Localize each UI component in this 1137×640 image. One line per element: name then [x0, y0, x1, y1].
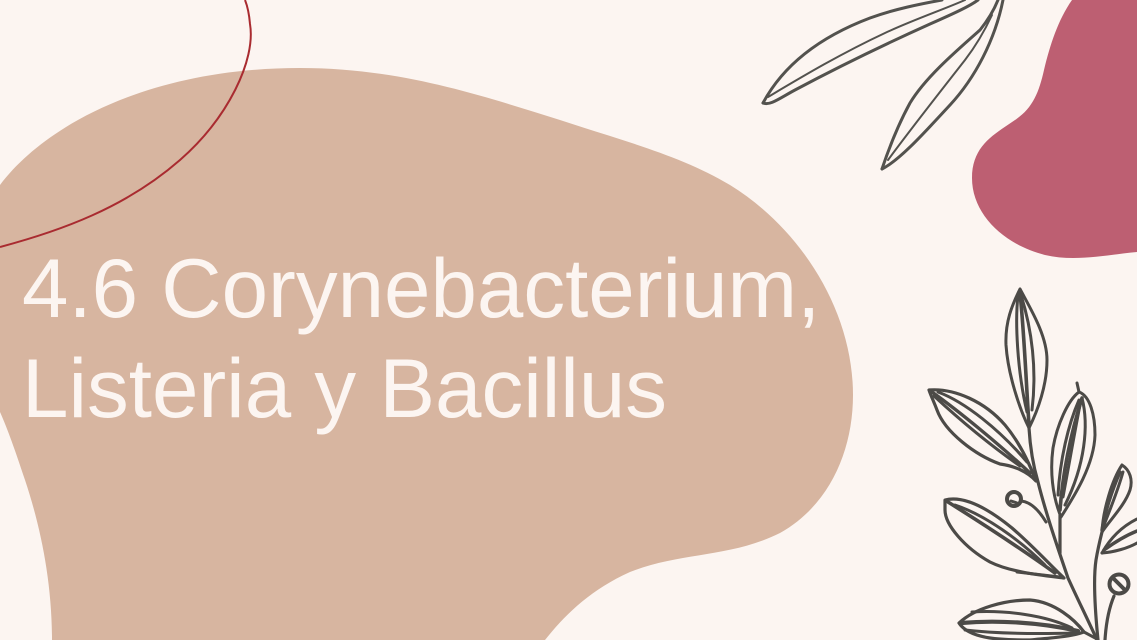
title: Listeria y Bacillus [22, 341, 667, 435]
leaf: upper left [929, 390, 1036, 481]
title: 4.6 Corynebacterium, [22, 241, 820, 335]
leaf: upper left [763, 0, 978, 104]
leaf: top [1006, 289, 1047, 428]
leaf: centre right [1052, 383, 1095, 517]
berry: left [1007, 492, 1046, 522]
tan background blob [0, 68, 853, 640]
leaf: far right lower [1102, 519, 1137, 553]
leaf: far right upper [1102, 465, 1131, 532]
main stems [1029, 428, 1102, 640]
leaf: lower [882, 0, 1003, 169]
title [22, 241, 820, 435]
top leaves illustration [763, 0, 1003, 169]
botanical branch illustration [929, 289, 1137, 640]
berry: right [1105, 574, 1128, 640]
pink blob [972, 0, 1137, 258]
red curved line [0, 0, 251, 247]
leaf: middle left [945, 499, 1064, 578]
leaf: bottom [959, 600, 1097, 640]
